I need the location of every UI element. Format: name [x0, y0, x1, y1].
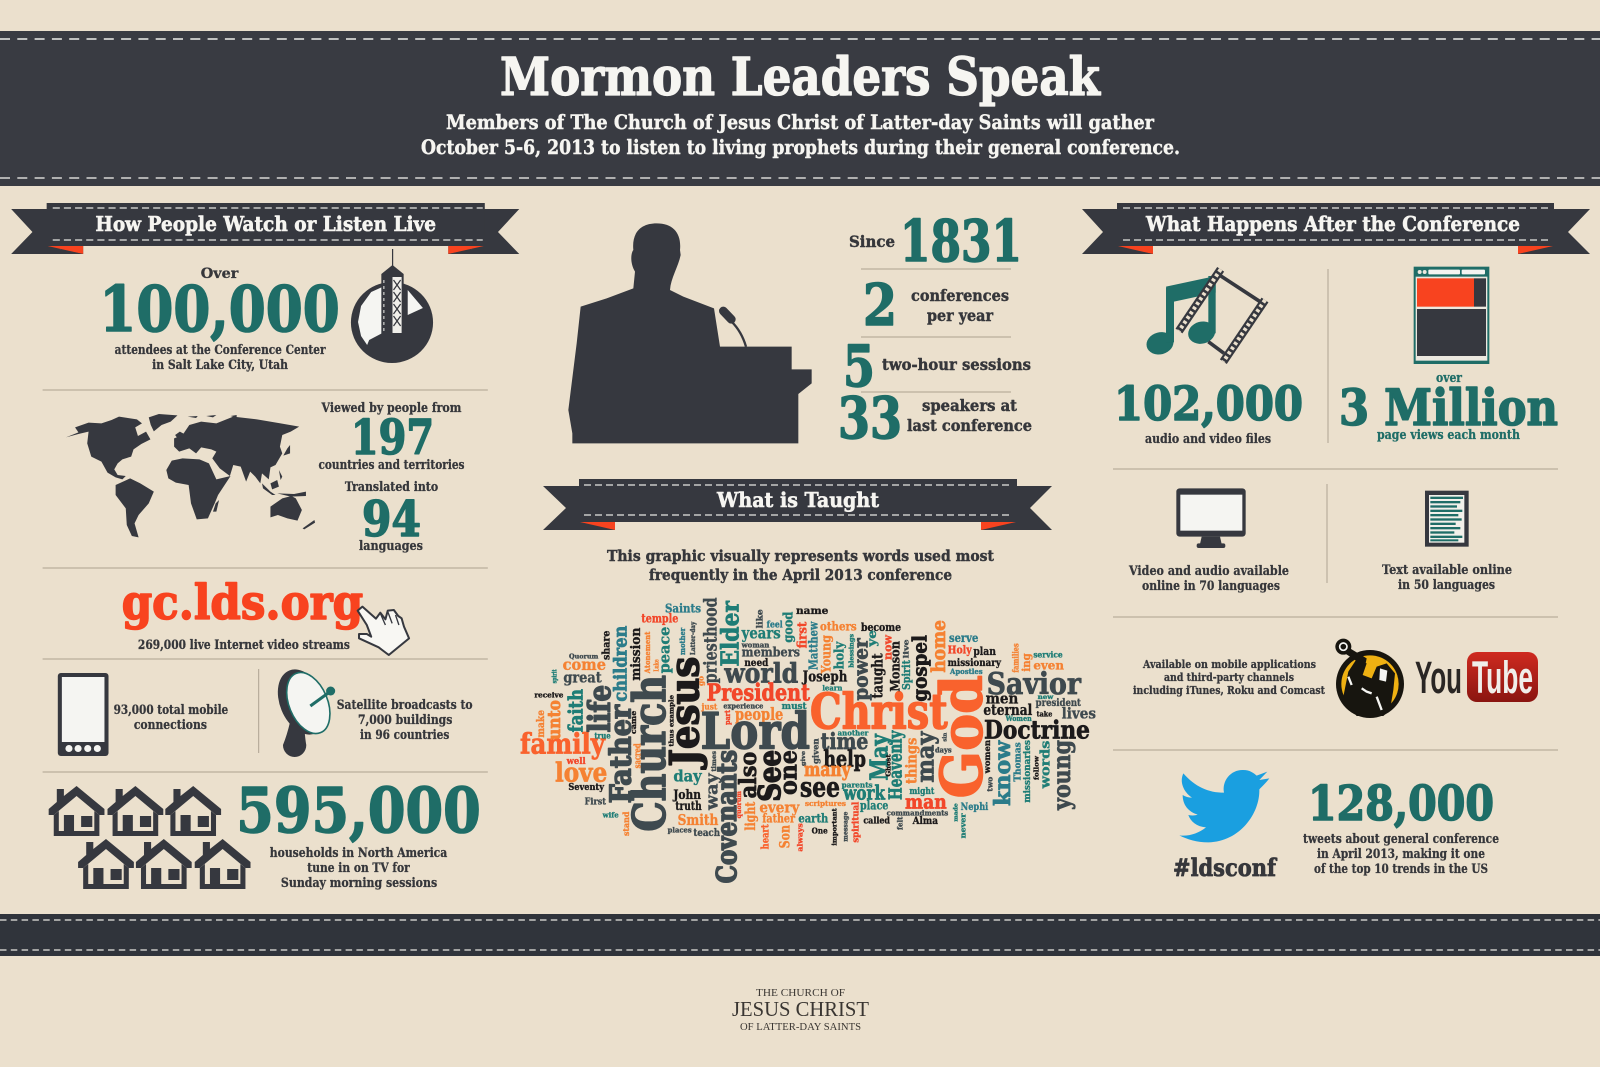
stat: 2 conferences per year: conferences: [911, 286, 1009, 305]
word cloud: well: [566, 757, 586, 767]
word cloud: John: [672, 787, 701, 802]
subtitle: Members of The Church of Jesus Christ of Latter-day Saints will gather: [446, 111, 1155, 134]
banner: how people watch: How People Watch or Listen Live: [95, 212, 436, 236]
banner: what is taught: [543, 479, 1052, 530]
stat: 197 countries and 94 languages: Viewed by people from: [321, 401, 462, 416]
stat: 197 countries and 94 languages: [318, 401, 465, 554]
word cloud: Luke: [652, 659, 660, 672]
word cloud: follow: [1033, 756, 1041, 780]
word cloud: light: [743, 801, 759, 831]
word cloud: Ghost: [886, 754, 893, 777]
word cloud: president: [1036, 698, 1081, 709]
word cloud: plan: [973, 644, 996, 658]
word cloud: Thomas: [1014, 742, 1024, 782]
word cloud: Latter-day: [690, 621, 697, 655]
word cloud: place: [860, 798, 889, 812]
word cloud: teach: [693, 826, 720, 839]
word cloud: See: [753, 750, 788, 802]
stat: 5 two-hour sessions: [843, 333, 1031, 400]
word cloud: members: [742, 645, 800, 661]
word cloud: One: [812, 825, 828, 835]
word cloud: might: [909, 787, 935, 797]
word cloud: family: [520, 727, 606, 760]
word cloud: called: [863, 815, 890, 826]
word cloud: Doctrine: [984, 714, 1090, 744]
stat: 595,000 households: [236, 773, 481, 891]
intro text: frequently in the April 2013 conference: [649, 566, 952, 584]
icon: mormon channel logo: [1335, 639, 1404, 718]
stat: 100,000 attendees: Over: [201, 266, 239, 282]
website: gc.lds.org: gc.lds.org: [122, 575, 363, 631]
text: mobile applications: including iTunes, Roku and Comcast: [1133, 683, 1326, 697]
word cloud: young: [1047, 740, 1076, 811]
word cloud: Smith: [678, 811, 718, 829]
stat: 197 countries and 94 languages: Translated into: [345, 480, 438, 495]
stat: 128,000 tweets: [1303, 776, 1499, 877]
word cloud: gospel: [909, 635, 932, 702]
word cloud: part: [723, 709, 732, 725]
word cloud: days: [935, 746, 952, 755]
text: video and audio: Video and audio available: [1128, 564, 1289, 579]
text: mobile applications: and third-party channels: [1164, 670, 1294, 684]
word cloud: lives: [1062, 704, 1096, 722]
word cloud: see: [800, 773, 840, 804]
stat: 595,000 households: tune in on TV for: [307, 861, 411, 876]
word cloud: feel: [767, 620, 783, 630]
word cloud: truth: [675, 799, 702, 813]
word cloud: one: [774, 750, 803, 795]
word cloud: Heavenly: [886, 730, 907, 800]
word cloud: scriptures: [805, 799, 846, 808]
word cloud: eternal: [983, 702, 1033, 719]
word cloud: Young: [819, 635, 834, 674]
word cloud: love: [555, 759, 607, 789]
text: video and audio: [1128, 564, 1289, 594]
word cloud: first: [795, 622, 810, 648]
intro text: [607, 547, 994, 584]
word cloud: spirit: [552, 669, 559, 683]
word cloud: learn: [822, 683, 843, 692]
stat: 595,000 households: Sunday morning sessions: [281, 876, 437, 891]
word cloud: wife: [602, 810, 619, 819]
word cloud: take: [1037, 710, 1053, 719]
word cloud: important: [831, 807, 839, 846]
panel: what is taught: [520, 479, 1096, 883]
word cloud: may: [910, 731, 939, 783]
word cloud: serve: [949, 630, 978, 645]
icon: houses: [49, 786, 251, 889]
stat: since 1831: Since: [849, 232, 895, 251]
word cloud: First: [585, 797, 606, 808]
intro text: This graphic visually represents words used most: [607, 547, 994, 565]
word cloud: always: [796, 823, 805, 852]
word cloud: commandments: [887, 809, 948, 818]
word cloud: places: [668, 825, 692, 834]
stat: 100,000 attendees: 100,000: [99, 271, 340, 346]
icon: text document: [1425, 491, 1469, 547]
word cloud: holy: [831, 641, 846, 669]
text: mobile applications: [1133, 657, 1326, 697]
word cloud: help: [823, 747, 866, 773]
icon: youtube logo: Tube: [1472, 652, 1533, 703]
footer band: [0, 914, 1600, 956]
word cloud: also: [734, 752, 762, 798]
word cloud: time: [821, 729, 868, 755]
word cloud: work: [843, 781, 885, 804]
word cloud: men: [986, 690, 1019, 707]
text: satellite broadcasts: Satellite broadcasts to: [337, 698, 473, 713]
word cloud: Quorum: [569, 652, 598, 660]
word cloud: Father: [603, 704, 638, 803]
header band: [0, 31, 1600, 186]
word cloud: earth: [798, 811, 829, 825]
word cloud: even: [1033, 657, 1064, 672]
stat: 595,000 households: households in North America: [270, 846, 448, 861]
word cloud: home: [928, 620, 950, 673]
stat: 3 million page views: 3 Million: [1339, 378, 1558, 437]
word cloud: service: [1033, 651, 1063, 661]
word cloud: parents: [842, 780, 873, 789]
stat: 33 speakers: speakers at: [922, 396, 1018, 415]
word cloud: good: [781, 612, 796, 643]
word cloud: faith: [565, 689, 588, 732]
stat: 595,000 households: 595,000: [236, 773, 481, 847]
word cloud: know: [990, 740, 1016, 806]
icon: desktop monitor: [1176, 488, 1246, 548]
stat: 33 speakers: [838, 385, 1032, 452]
word cloud: give: [801, 751, 807, 766]
word cloud: women: [982, 740, 992, 774]
word cloud: day: [673, 767, 702, 786]
banner: what is taught: What is Taught: [716, 488, 879, 512]
word cloud: come: [563, 655, 606, 674]
word cloud: families: [1010, 643, 1020, 673]
icon: browser window: [1414, 267, 1489, 364]
hashtag: #ldsconf: [1173, 853, 1277, 882]
word cloud: God: [930, 675, 996, 798]
word cloud: others: [820, 620, 857, 634]
word cloud: power: [849, 638, 872, 701]
stat: 128,000 tweets: of the top 10 trends in the US: [1314, 862, 1488, 877]
word cloud: like: [754, 609, 764, 628]
word cloud: Seventy: [568, 782, 605, 793]
stat: since 1831: 1831: [900, 208, 1022, 275]
icon: speaker at pulpit silhouette: [568, 223, 812, 443]
stat: 128,000 tweets: tweets about general conference: [1303, 832, 1499, 847]
stat: 197 countries and 94 languages: languages: [359, 539, 423, 554]
word cloud: ing: [1019, 653, 1033, 672]
word cloud: true: [594, 731, 611, 741]
banner: how people watch: [11, 203, 519, 254]
word cloud: missionaries: [1023, 740, 1033, 803]
icon: pointer hand: [358, 607, 409, 655]
stat: 100,000 attendees: in Salt Lake City, Utah: [152, 358, 288, 373]
word cloud: great: [563, 668, 602, 686]
icon: satellite dish: [269, 662, 338, 757]
word cloud: Monson: [887, 641, 902, 692]
word cloud: world: [723, 658, 799, 689]
word cloud: words: [1037, 741, 1052, 789]
word cloud: ye: [865, 630, 879, 648]
word cloud: two: [985, 776, 994, 792]
stat: 3 million page views: page views each month: [1377, 428, 1520, 443]
text: mobile connections: 93,000 total mobile: [114, 703, 228, 718]
text: text available online: [1382, 563, 1512, 593]
word cloud: new: [1038, 693, 1054, 701]
word cloud: make: [534, 710, 547, 738]
word cloud: unto: [545, 700, 565, 740]
stat: 128,000 tweets: 128,000: [1308, 776, 1494, 832]
icon: youtube logo: [1415, 652, 1538, 703]
word cloud: mission: [628, 627, 644, 681]
title: Mormon Leaders Speak: [500, 47, 1101, 108]
word cloud: missionary: [948, 658, 1002, 669]
stat: 197 countries and 94 languages: countries and territories: [318, 458, 465, 473]
text: text available online: Text available online: [1382, 563, 1512, 578]
word cloud: need: [744, 656, 769, 669]
footer logo: the church of jesus christ: [732, 987, 869, 1033]
word cloud: now: [881, 635, 895, 660]
stat: since 1831: [849, 208, 1022, 275]
word cloud: name: [796, 604, 829, 617]
text: satellite broadcasts: in 96 countries: [360, 728, 449, 743]
word cloud: father: [762, 812, 796, 826]
website: gc.lds.org: [122, 575, 363, 653]
word cloud: many: [804, 758, 851, 781]
word cloud: years: [741, 623, 781, 642]
subtitle: October 5-6, 2013 to listen to living prophets during their general conference.: [421, 136, 1180, 159]
word cloud: mother: [678, 628, 687, 655]
stat: 3 million page views: over: [1436, 371, 1462, 386]
word cloud: Church: [623, 675, 676, 832]
word cloud: receive: [534, 690, 564, 699]
word cloud: Joseph: [801, 668, 847, 686]
word cloud: just: [701, 702, 717, 712]
word cloud: Matthew: [806, 621, 820, 670]
word cloud: stand: [621, 812, 631, 836]
word cloud: thus example: [667, 695, 675, 747]
text: satellite broadcasts: 7,000 buildings: [358, 713, 452, 728]
word cloud: quorum: [735, 791, 743, 818]
text: mobile connections: [114, 703, 228, 733]
word cloud: blessings: [848, 633, 855, 668]
footer logo: the church of jesus christ: OF LATTER-DAY SAINTS: [740, 1022, 861, 1033]
word cloud: message: [841, 812, 849, 842]
word cloud: children: [611, 626, 632, 702]
text: mobile connections: connections: [134, 718, 207, 733]
word cloud: felt: [896, 816, 905, 830]
word cloud: [520, 597, 1096, 883]
word cloud: May: [864, 733, 893, 781]
website: gc.lds.org: 269,000 live Internet video streams: [138, 638, 350, 653]
word cloud: become: [861, 621, 901, 634]
world map: [66, 414, 315, 537]
word cloud: made: [953, 803, 959, 822]
stat: 33 speakers: 33: [838, 385, 902, 452]
word cloud: experience: [723, 702, 764, 711]
word cloud: life: [583, 685, 618, 732]
stat: 128,000 tweets: in April 2013, making it one: [1317, 847, 1485, 862]
stat: 100,000 attendees: [99, 266, 340, 373]
footer logo: the church of jesus christ: JESUS CHRIST: [732, 997, 869, 1021]
word cloud: sacred: [634, 743, 644, 768]
word cloud: spiritual: [851, 801, 861, 843]
word cloud: President: [707, 679, 810, 707]
text: satellite broadcasts: [337, 698, 473, 743]
word cloud: Women: [1005, 714, 1032, 723]
word cloud: things: [903, 738, 921, 784]
word cloud: live: [901, 639, 910, 658]
word cloud: people: [735, 704, 783, 724]
word cloud: came: [629, 710, 638, 734]
word cloud: Covenants: [712, 750, 743, 883]
word cloud: Son: [777, 825, 793, 848]
word cloud: Alma: [912, 814, 938, 827]
word cloud: temple: [641, 612, 678, 626]
word cloud: must: [782, 702, 808, 712]
stat: 197 countries and 94 languages: 94: [362, 490, 421, 548]
stat: 102,000 files: 102,000: [1114, 377, 1303, 432]
panel: speaker and conference facts: [568, 208, 1032, 452]
footer logo: the church of jesus christ: THE CHURCH OF: [756, 987, 845, 999]
word cloud: Apostles: [949, 667, 983, 676]
word cloud: way: [701, 772, 721, 811]
stat: 33 speakers: last conference: [907, 416, 1032, 435]
word cloud: Nephi: [961, 800, 988, 813]
word cloud: sin: [943, 733, 949, 742]
word cloud: priesthood: [701, 597, 722, 683]
panel: what happens after the conference: [1082, 203, 1590, 882]
word cloud: never: [959, 812, 968, 838]
word cloud: Elder: [715, 600, 744, 667]
word cloud: Lord: [701, 701, 810, 760]
panel: how people watch or listen live: [11, 203, 519, 891]
icon: twitter bird: [1179, 770, 1269, 842]
banner: what happens after: What Happens After the Conference: [1145, 212, 1520, 236]
word cloud: man: [905, 789, 947, 813]
stat: 100,000 attendees: attendees at the Conference Center: [115, 343, 326, 358]
icon: music note and film strip: [1144, 269, 1265, 362]
word cloud: Saints: [665, 600, 701, 615]
word cloud: share: [599, 630, 612, 660]
word cloud: Jesus: [661, 657, 708, 769]
word cloud: heart: [758, 824, 771, 849]
stat: 5 two-hour sessions: 5: [843, 333, 875, 400]
word cloud: Holy: [948, 642, 972, 656]
word cloud: Spirit: [899, 659, 913, 690]
word cloud: another: [838, 729, 869, 738]
subtitle: [421, 111, 1180, 159]
word cloud: taught: [869, 653, 887, 698]
stat: 2 conferences per year: 2: [863, 272, 897, 339]
word cloud: go: [696, 676, 705, 686]
text: text available online: in 50 languages: [1398, 578, 1495, 593]
icon: mobile device: [58, 673, 109, 756]
icon: conference center tower: [351, 249, 433, 363]
stat: 2 conferences per year: [863, 272, 1009, 339]
word cloud: Atonement: [643, 631, 652, 674]
icon: youtube logo: You: [1415, 652, 1462, 703]
stat: 5 two-hour sessions: two-hour sessions: [882, 355, 1031, 374]
word cloud: times: [711, 750, 718, 772]
banner: what happens after: [1082, 203, 1590, 254]
word cloud: woman: [741, 640, 769, 649]
word cloud: Savior: [987, 667, 1082, 702]
word cloud: peace: [655, 626, 673, 673]
text: mobile applications: Available on mobile applications: [1142, 657, 1316, 671]
text: video and audio: online in 70 languages: [1142, 579, 1280, 594]
word cloud: Christ: [810, 683, 948, 740]
word cloud: every: [759, 798, 800, 816]
stat: 197 countries and 94 languages: 197: [351, 410, 434, 466]
stat: 102,000 files: audio and video files: [1145, 432, 1271, 447]
word cloud: given: [810, 738, 820, 764]
stat: 2 conferences per year: per year: [927, 306, 994, 325]
